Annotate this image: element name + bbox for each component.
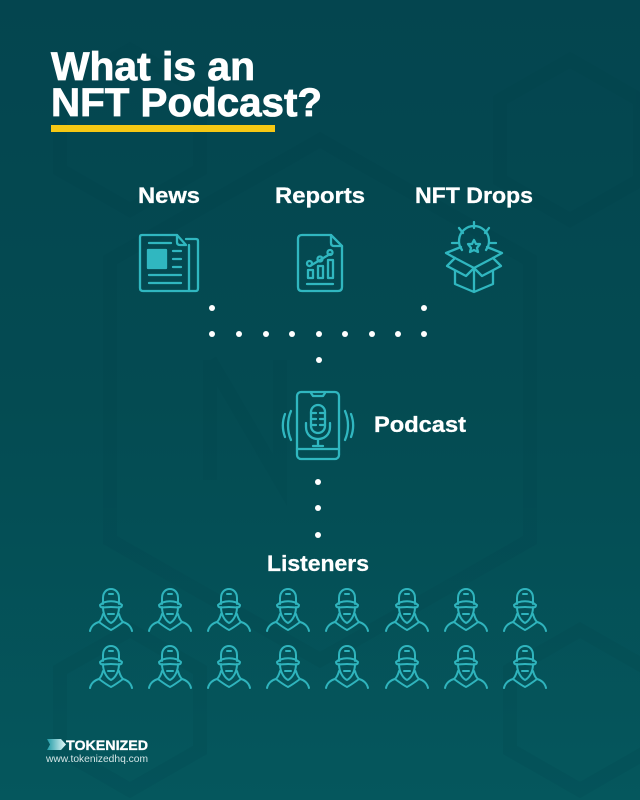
label: Podcast: Podcast bbox=[374, 412, 467, 437]
label: Reports: Reports bbox=[275, 183, 365, 208]
label: News: News bbox=[138, 183, 200, 208]
title bbox=[51, 45, 322, 132]
logo mark bbox=[47, 739, 66, 750]
label: Listeners: Listeners bbox=[267, 551, 369, 576]
icon: phone with microphone bbox=[283, 392, 353, 459]
icon: report document bbox=[298, 235, 342, 291]
icon: newspaper bbox=[140, 235, 198, 291]
connector dots bbox=[209, 305, 427, 538]
footer logo bbox=[45, 738, 148, 765]
footer logo: TOKENIZED bbox=[66, 738, 148, 753]
label: NFT Drops: NFT Drops bbox=[415, 183, 533, 208]
title underline bbox=[51, 125, 275, 132]
icon: open box with star bbox=[446, 222, 502, 292]
title: What is an bbox=[51, 45, 255, 89]
listeners grid bbox=[90, 589, 546, 688]
footer logo: www.tokenizedhq.com bbox=[45, 753, 148, 765]
title: NFT Podcast? bbox=[51, 81, 322, 125]
